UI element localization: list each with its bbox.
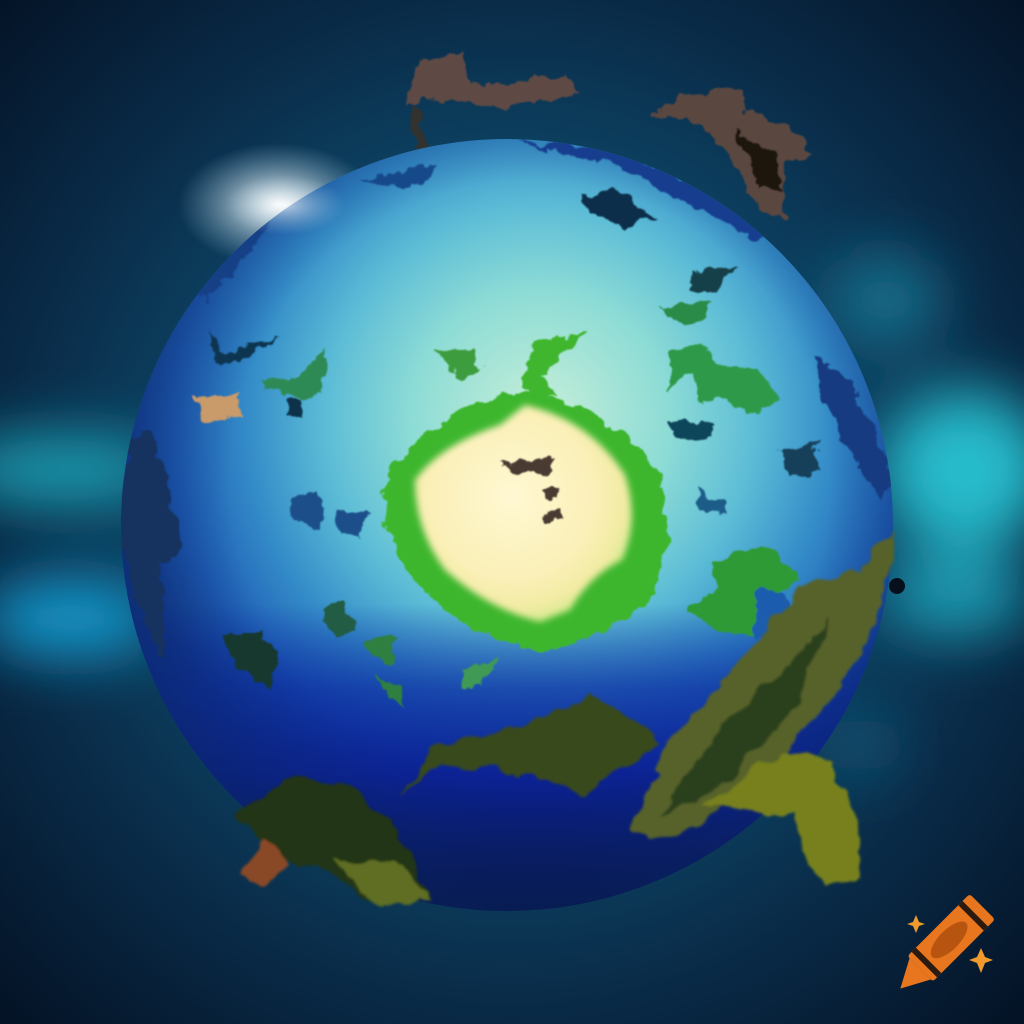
land: northern islands <box>362 165 820 515</box>
land: south-east green islands <box>688 545 800 642</box>
land: western islands <box>195 330 500 708</box>
logo: crayon with sparkles <box>888 894 995 1001</box>
bright sun flare <box>178 143 378 267</box>
sun flare over globe edge <box>225 175 345 235</box>
glow: cyan aurora behind globe <box>0 255 1024 773</box>
clouds: brown above globe <box>405 50 812 218</box>
moon: small dark dot at globe edge <box>889 578 905 594</box>
land: central green ring with pale core <box>384 330 667 652</box>
globe: ocean sphere <box>100 139 920 914</box>
land: southern olive continent <box>235 530 892 908</box>
